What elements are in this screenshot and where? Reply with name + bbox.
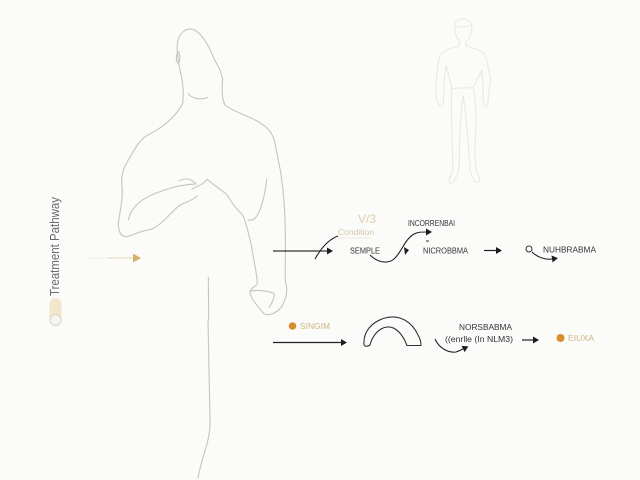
orange dot label: SINGIM bbox=[300, 322, 330, 331]
label: right node: NUHBRABMA bbox=[543, 246, 597, 254]
arrow: main into upper row bbox=[273, 250, 327, 252]
upper flow row bbox=[273, 212, 597, 262]
curved connector to label bbox=[315, 236, 338, 259]
gold input arrow bbox=[88, 254, 141, 262]
arch shape bbox=[364, 317, 421, 346]
label: lower node title: NORSBABMA bbox=[459, 323, 513, 332]
curved connector bbox=[370, 232, 426, 262]
orange dot end label bbox=[556, 334, 595, 343]
orange dot label bbox=[289, 322, 330, 331]
vertical side title bbox=[47, 197, 62, 326]
version label: V/3 bbox=[358, 212, 376, 226]
node with curved arrow bbox=[526, 246, 552, 259]
lower flow row bbox=[273, 317, 595, 352]
small background body figure bbox=[436, 19, 491, 183]
curved double arrow bbox=[435, 339, 463, 352]
label: middle node: NICROBBMA bbox=[423, 246, 469, 256]
arrow: to end node bbox=[522, 339, 533, 341]
label: sample: SEMPLE bbox=[350, 246, 380, 256]
mid arrowhead bbox=[404, 247, 409, 255]
side title text: Treatment Pathway bbox=[47, 197, 62, 296]
gold caption: Condition bbox=[338, 227, 374, 237]
large body outline figure bbox=[118, 29, 287, 478]
label: top node: INCORRENBAI bbox=[408, 219, 455, 228]
arrow: to right node bbox=[484, 250, 496, 252]
arrow: main into lower row bbox=[273, 342, 341, 344]
label: lower node subtitle: ((enrlle (In NLM3) bbox=[445, 335, 513, 344]
side title badge bbox=[50, 298, 62, 326]
orange dot end label: EIUXA bbox=[568, 334, 595, 343]
